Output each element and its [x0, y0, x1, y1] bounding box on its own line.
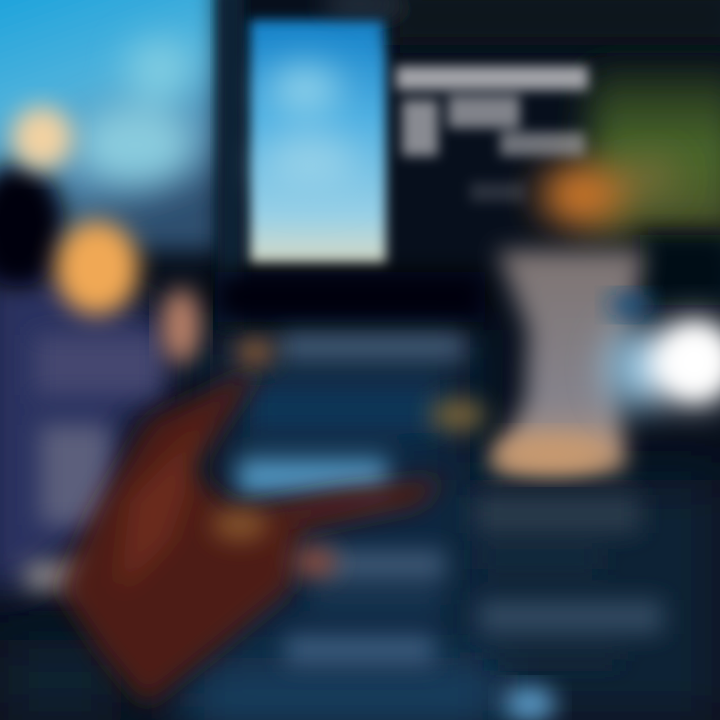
- panel: dark band on the right: [640, 235, 720, 305]
- text block: blurred heading: [396, 66, 588, 202]
- panel: body details: [25, 335, 160, 590]
- panel: person body: [0, 260, 170, 590]
- panel: hourglass shape: [490, 250, 645, 470]
- icon: small blue dot: [504, 686, 556, 720]
- panel: green landscape: [590, 70, 720, 235]
- panel: bright window: [250, 20, 386, 264]
- light orb: top: [11, 106, 73, 170]
- light orb: small: [161, 288, 201, 364]
- white light core: [663, 328, 720, 396]
- hand: palm and fingers: [60, 365, 445, 705]
- orange glow: [540, 156, 676, 227]
- dark pillar: [218, 0, 244, 330]
- glow: white light: [606, 320, 720, 410]
- light orb: large orange: [55, 221, 139, 315]
- panel: right list rows: [475, 495, 663, 664]
- hand: finger tips: [212, 339, 486, 578]
- panel: dark upper header: [215, 0, 720, 322]
- panel: sky on the left: [0, 0, 218, 250]
- panel: blue accent near light: [608, 293, 652, 317]
- sky highlights: [75, 40, 195, 185]
- hourglass base: [492, 435, 612, 475]
- dark head silhouette: [0, 163, 64, 287]
- panel: lower background tones: [0, 330, 720, 720]
- panel: window clouds: [264, 66, 356, 193]
- panel: central list rows: [238, 335, 465, 665]
